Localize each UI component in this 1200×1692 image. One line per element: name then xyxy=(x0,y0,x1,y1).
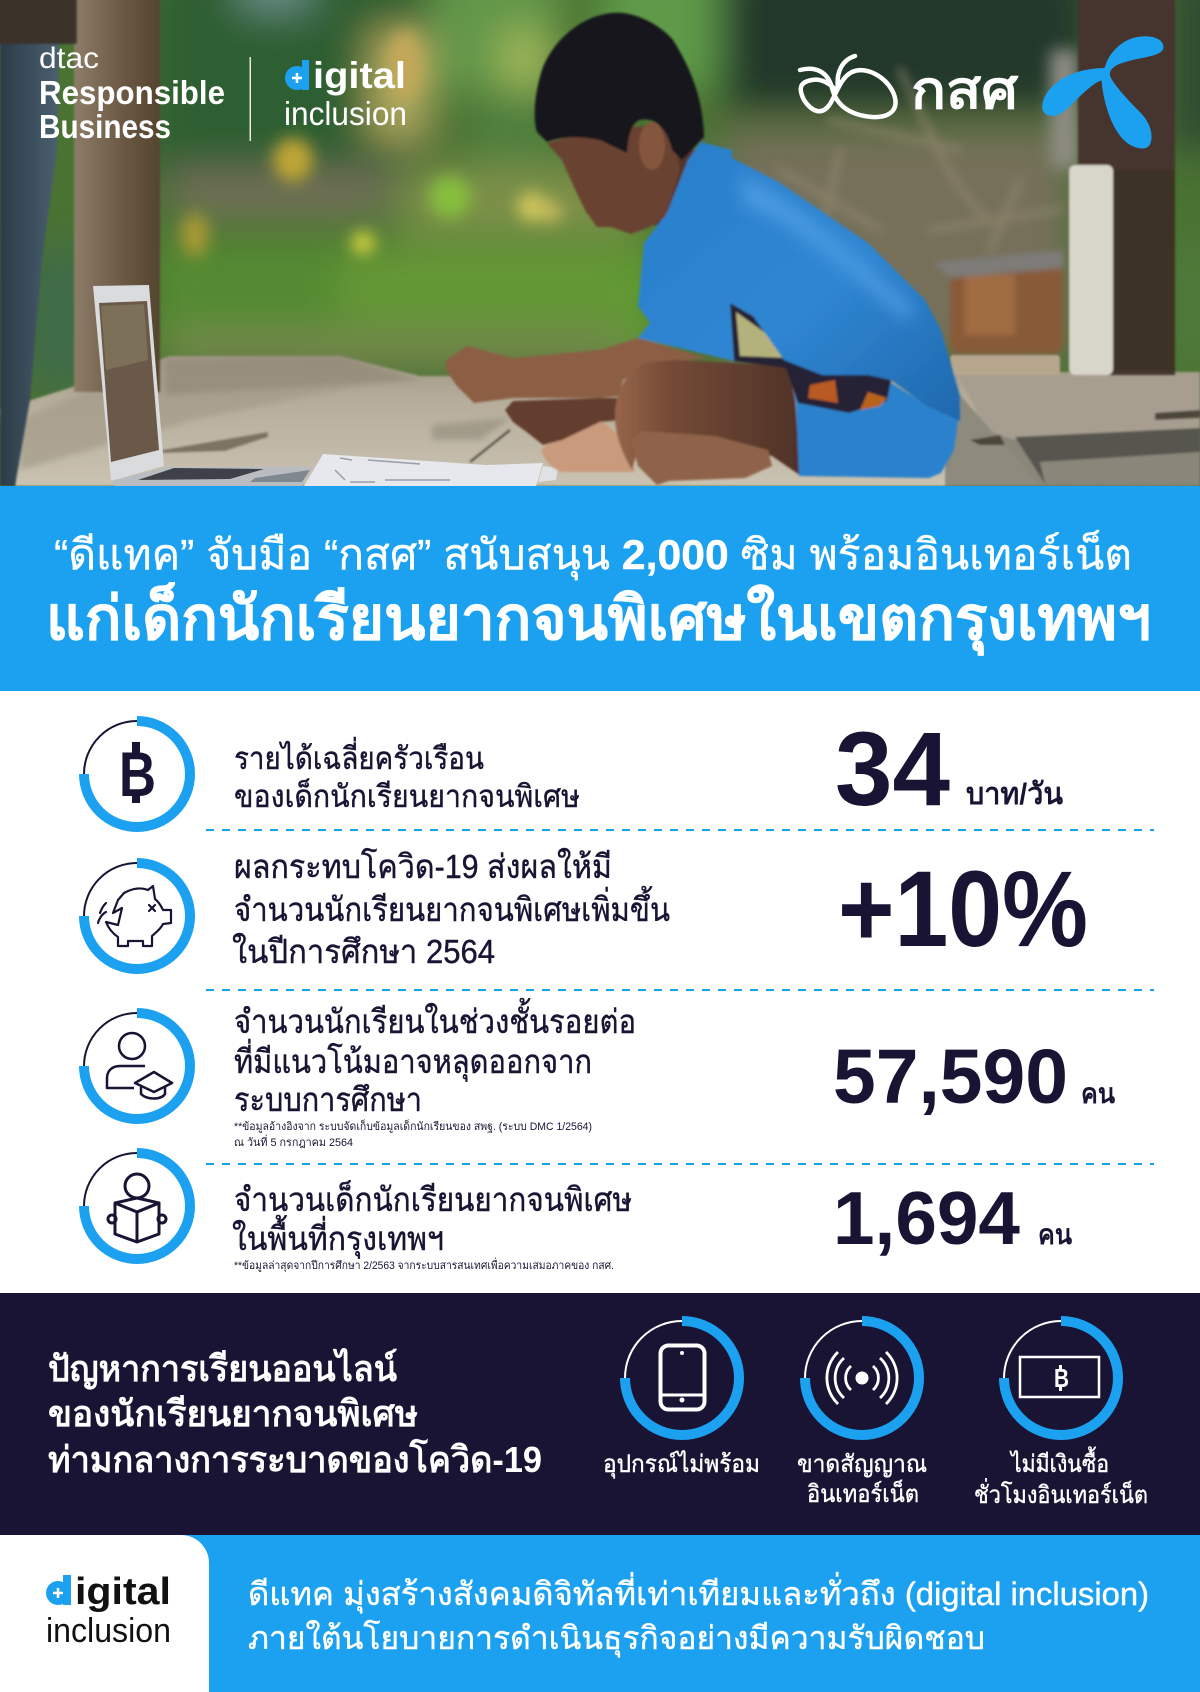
posts xyxy=(0,0,1175,486)
icon: broken piggy bank ring xyxy=(84,863,190,969)
wood deck xyxy=(0,355,1200,486)
stat: 57,590 people: คน xyxy=(1081,1078,1115,1109)
logo divider xyxy=(250,57,251,141)
icon: student with cap ring xyxy=(84,1013,190,1119)
text: at-risk students: ระบบการศึกษา xyxy=(234,1081,422,1118)
footer statement text: ดีแทค มุ่งสร้างสังคมดิจิทัลที่เท่าเทียมและทั่วถึง (digital inclusion) xyxy=(248,1572,1149,1614)
logo: dtac Responsible Business: dtac xyxy=(39,42,99,75)
icon: banknote ring xyxy=(1004,1321,1118,1435)
heading: online learning problems: ของนักเรียนยากจนพิเศษ xyxy=(48,1393,418,1434)
item: device not ready: อุปกรณ์ไม่พร้อม xyxy=(603,1450,760,1479)
panel: statistics xyxy=(0,691,1200,1293)
text: Bangkok students: ในพื้นที่กรุงเทพฯ xyxy=(232,1215,444,1259)
stat: 1,694 people: 1,694 xyxy=(833,1176,1020,1260)
boy: foot xyxy=(631,431,772,485)
item: no money for internet xyxy=(974,1321,1148,1509)
row: Bangkok students xyxy=(84,1153,1072,1272)
stat: 34 baht per day: บาท/วัน xyxy=(966,778,1063,811)
text: covid impact: จำนวนนักเรียนยากจนพิเศษเพิ่มขึ้น xyxy=(234,886,670,928)
row: covid impact xyxy=(84,848,1088,970)
laptop xyxy=(93,285,312,486)
logo: dtac propeller xyxy=(1044,38,1161,146)
boy: arm and fist xyxy=(446,338,707,403)
item: no internet signal: ขาดสัญญาณ xyxy=(797,1451,927,1478)
row: at-risk students xyxy=(84,998,1115,1149)
item: device not ready xyxy=(603,1321,760,1479)
footer logo tab: inclusion xyxy=(46,1612,171,1650)
footer logo tab xyxy=(0,1535,209,1692)
row: household income xyxy=(84,711,1063,828)
footer logo tab: igital xyxy=(75,1571,171,1613)
footnote: OBEC source: **ข้อมูลอ้างอิงจาก ระบบจัดเก็บข้อมูลเด็กนักเรียนของ สพฐ. (ระบบ DMC 1/2564) xyxy=(234,1119,592,1133)
boy: neck xyxy=(640,150,695,225)
stat: 34 baht per day xyxy=(835,711,1063,828)
icon: child reading book ring xyxy=(84,1153,190,1259)
logo: กสศ xyxy=(800,56,1019,120)
text: at-risk students xyxy=(234,998,636,1118)
text: Bangkok students xyxy=(232,1180,632,1259)
text: covid impact xyxy=(232,848,670,970)
logo: digital inclusion: inclusion xyxy=(284,95,407,132)
blurred garden background xyxy=(30,0,1200,390)
footer statement text xyxy=(248,1572,1149,1658)
item: no internet signal xyxy=(797,1321,927,1508)
heading: online learning problems: ท่ามกลางการระบาดของโควิด-19 xyxy=(48,1438,542,1480)
boy: folded leg xyxy=(615,360,801,476)
text: Bangkok students: จำนวนเด็กนักเรียนยากจนพิเศษ xyxy=(234,1180,632,1218)
stat: 1,694 people: คน xyxy=(1038,1219,1072,1250)
boy: far foot xyxy=(541,420,635,472)
text: covid impact: ในปีการศึกษา 2564 xyxy=(232,933,495,970)
panel: footer statement xyxy=(0,1535,1200,1692)
open workbook xyxy=(304,454,558,486)
heading: online learning problems xyxy=(48,1347,542,1480)
stat: 57,590 people: 57,590 xyxy=(833,1034,1068,1120)
logo: digital inclusion: igital xyxy=(313,55,406,96)
twigs xyxy=(780,70,1060,250)
boy xyxy=(446,13,960,485)
logo: dtac Responsible Business xyxy=(39,42,225,145)
footnote: OBEC source xyxy=(234,1119,592,1149)
panel: headline banner xyxy=(0,486,1200,691)
icon: smartphone ring xyxy=(625,1321,739,1435)
text: at-risk students: ที่มีแนวโน้มอาจหลุดออกจาก xyxy=(234,1039,592,1082)
boy: ear xyxy=(639,122,665,170)
icon: banknote ring: B xyxy=(1054,1363,1069,1393)
heading: online learning problems: ปัญหาการเรียนออนไลน์ xyxy=(48,1347,397,1390)
boy: lower hand xyxy=(505,398,622,445)
boy: hair xyxy=(535,13,704,160)
text: at-risk students: จำนวนนักเรียนในช่วงชั้นรอยต่อ xyxy=(234,998,636,1040)
logo: กสศ: กสศ xyxy=(911,62,1019,120)
boy: patterned waistband xyxy=(730,303,891,413)
item: no internet signal: อินเทอร์เน็ต xyxy=(807,1479,919,1508)
icon: baht coin ring xyxy=(84,721,190,827)
boy: shirt xyxy=(638,142,960,421)
headline line 2: แก่เด็กนักเรียนยากจนพิเศษในเขตกรุงเทพฯ xyxy=(46,582,1151,656)
headline line 1: “ดีแทค” จับมือ “กสศ” สนับสนุน 2,000 ซิม พร้อมอินเทอร์เน็ต xyxy=(54,530,1132,581)
text: household income: ของเด็กนักเรียนยากจนพิเศษ xyxy=(234,778,580,814)
stat: 34 baht per day: 34 xyxy=(835,711,950,828)
text: household income: รายได้เฉลี่ยครัวเรือน xyxy=(234,737,484,776)
footnote: EEF source: **ข้อมูลล่าสุดจากปีการศึกษา 2/2563 จากระบบสารสนเทศเพื่อความเสมอภาคของ กสศ. xyxy=(234,1257,614,1272)
item: no money for internet: ไม่มีเงินซื้อ xyxy=(1009,1446,1109,1478)
icon: signal ring xyxy=(805,1321,919,1435)
icon: baht coin ring: B xyxy=(119,740,156,810)
text: covid impact: ผลกระทบโควิด-19 ส่งผลให้มี xyxy=(234,848,612,885)
stat: plus 10 percent: +10% xyxy=(838,848,1088,969)
logo: dtac Responsible Business: Business xyxy=(39,108,171,145)
text: household income xyxy=(234,737,580,814)
logo: digital inclusion xyxy=(284,55,407,132)
logo: dtac Responsible Business: Responsible xyxy=(39,74,225,111)
boy: shorts xyxy=(790,372,958,478)
panel: online learning problems xyxy=(0,1293,1200,1535)
footer statement text: ภายใต้นโยบายการดำเนินธุรกิจอย่างมีความรับผิดชอบ xyxy=(248,1620,985,1658)
hero photo: boy studying with laptop xyxy=(0,0,1200,486)
flower pot xyxy=(934,250,1063,354)
item: no money for internet: ชั่วโมงอินเทอร์เน็ต xyxy=(974,1478,1148,1509)
footnote: OBEC source: ณ วันที่ 5 กรกฎาคม 2564 xyxy=(234,1134,353,1149)
boy: face xyxy=(547,125,680,234)
